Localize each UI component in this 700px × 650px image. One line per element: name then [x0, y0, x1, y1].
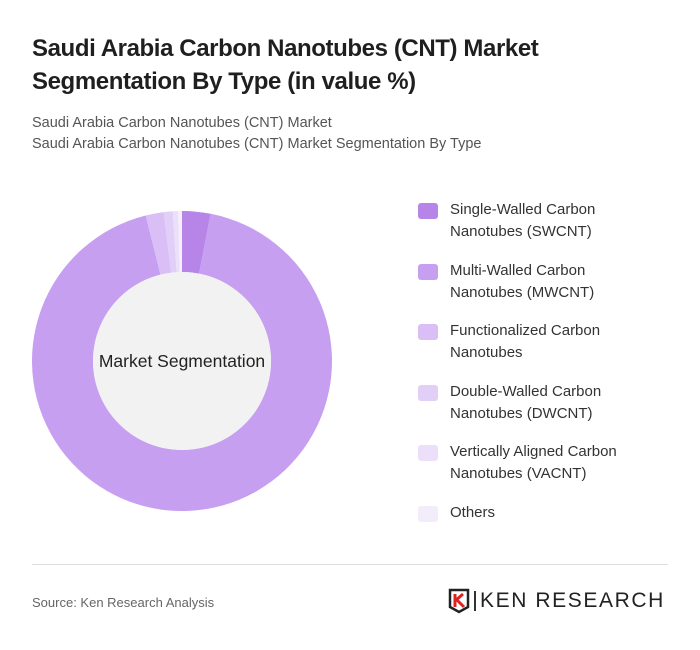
text: Multi-Walled Carbon: [450, 262, 585, 279]
legend: DWCNT: [418, 383, 601, 422]
legend: MWCNT: [418, 262, 594, 301]
text: Nanotubes (DWCNT): [450, 405, 593, 422]
legend: functionalized: [418, 322, 600, 361]
logo: [448, 588, 665, 614]
slice: functionalized: [146, 212, 171, 275]
slice: DWCNT: [164, 211, 177, 273]
legend: VACNT: [418, 443, 617, 482]
slice: SWCNT: [182, 211, 211, 274]
logo icon: [448, 588, 470, 614]
text: Single-Walled Carbon: [450, 201, 595, 218]
text: Vertically Aligned Carbon: [450, 443, 617, 460]
donut chart: [32, 211, 332, 511]
slice: MWCNT: [32, 214, 332, 511]
text: Functionalized Carbon: [450, 322, 600, 339]
donut center: [93, 272, 271, 450]
title: Saudi Arabia Carbon Nanotubes (CNT) Market: [32, 35, 538, 62]
slice: VACNT: [173, 211, 180, 272]
legend: others: [418, 504, 495, 522]
title: [32, 35, 538, 95]
subtitle: Saudi Arabia Carbon Nanotubes (CNT) Market Segmentation By Type: [32, 136, 481, 152]
source: Source: Ken Research Analysis: [32, 595, 214, 610]
logo text: KEN RESEARCH: [480, 589, 665, 612]
slice: others: [178, 211, 182, 272]
title: Segmentation By Type (in value %): [32, 68, 416, 95]
text: Nanotubes (VACNT): [450, 465, 586, 482]
text: Double-Walled Carbon: [450, 383, 601, 400]
text: Nanotubes (SWCNT): [450, 223, 592, 240]
center label: Market Segmentation: [99, 351, 265, 371]
text: Nanotubes (MWCNT): [450, 284, 594, 301]
legend: SWCNT: [418, 201, 595, 240]
subtitle: Saudi Arabia Carbon Nanotubes (CNT) Market: [32, 115, 332, 131]
text: Nanotubes: [450, 344, 523, 361]
subtitle: [32, 115, 481, 152]
text: Others: [450, 504, 495, 521]
